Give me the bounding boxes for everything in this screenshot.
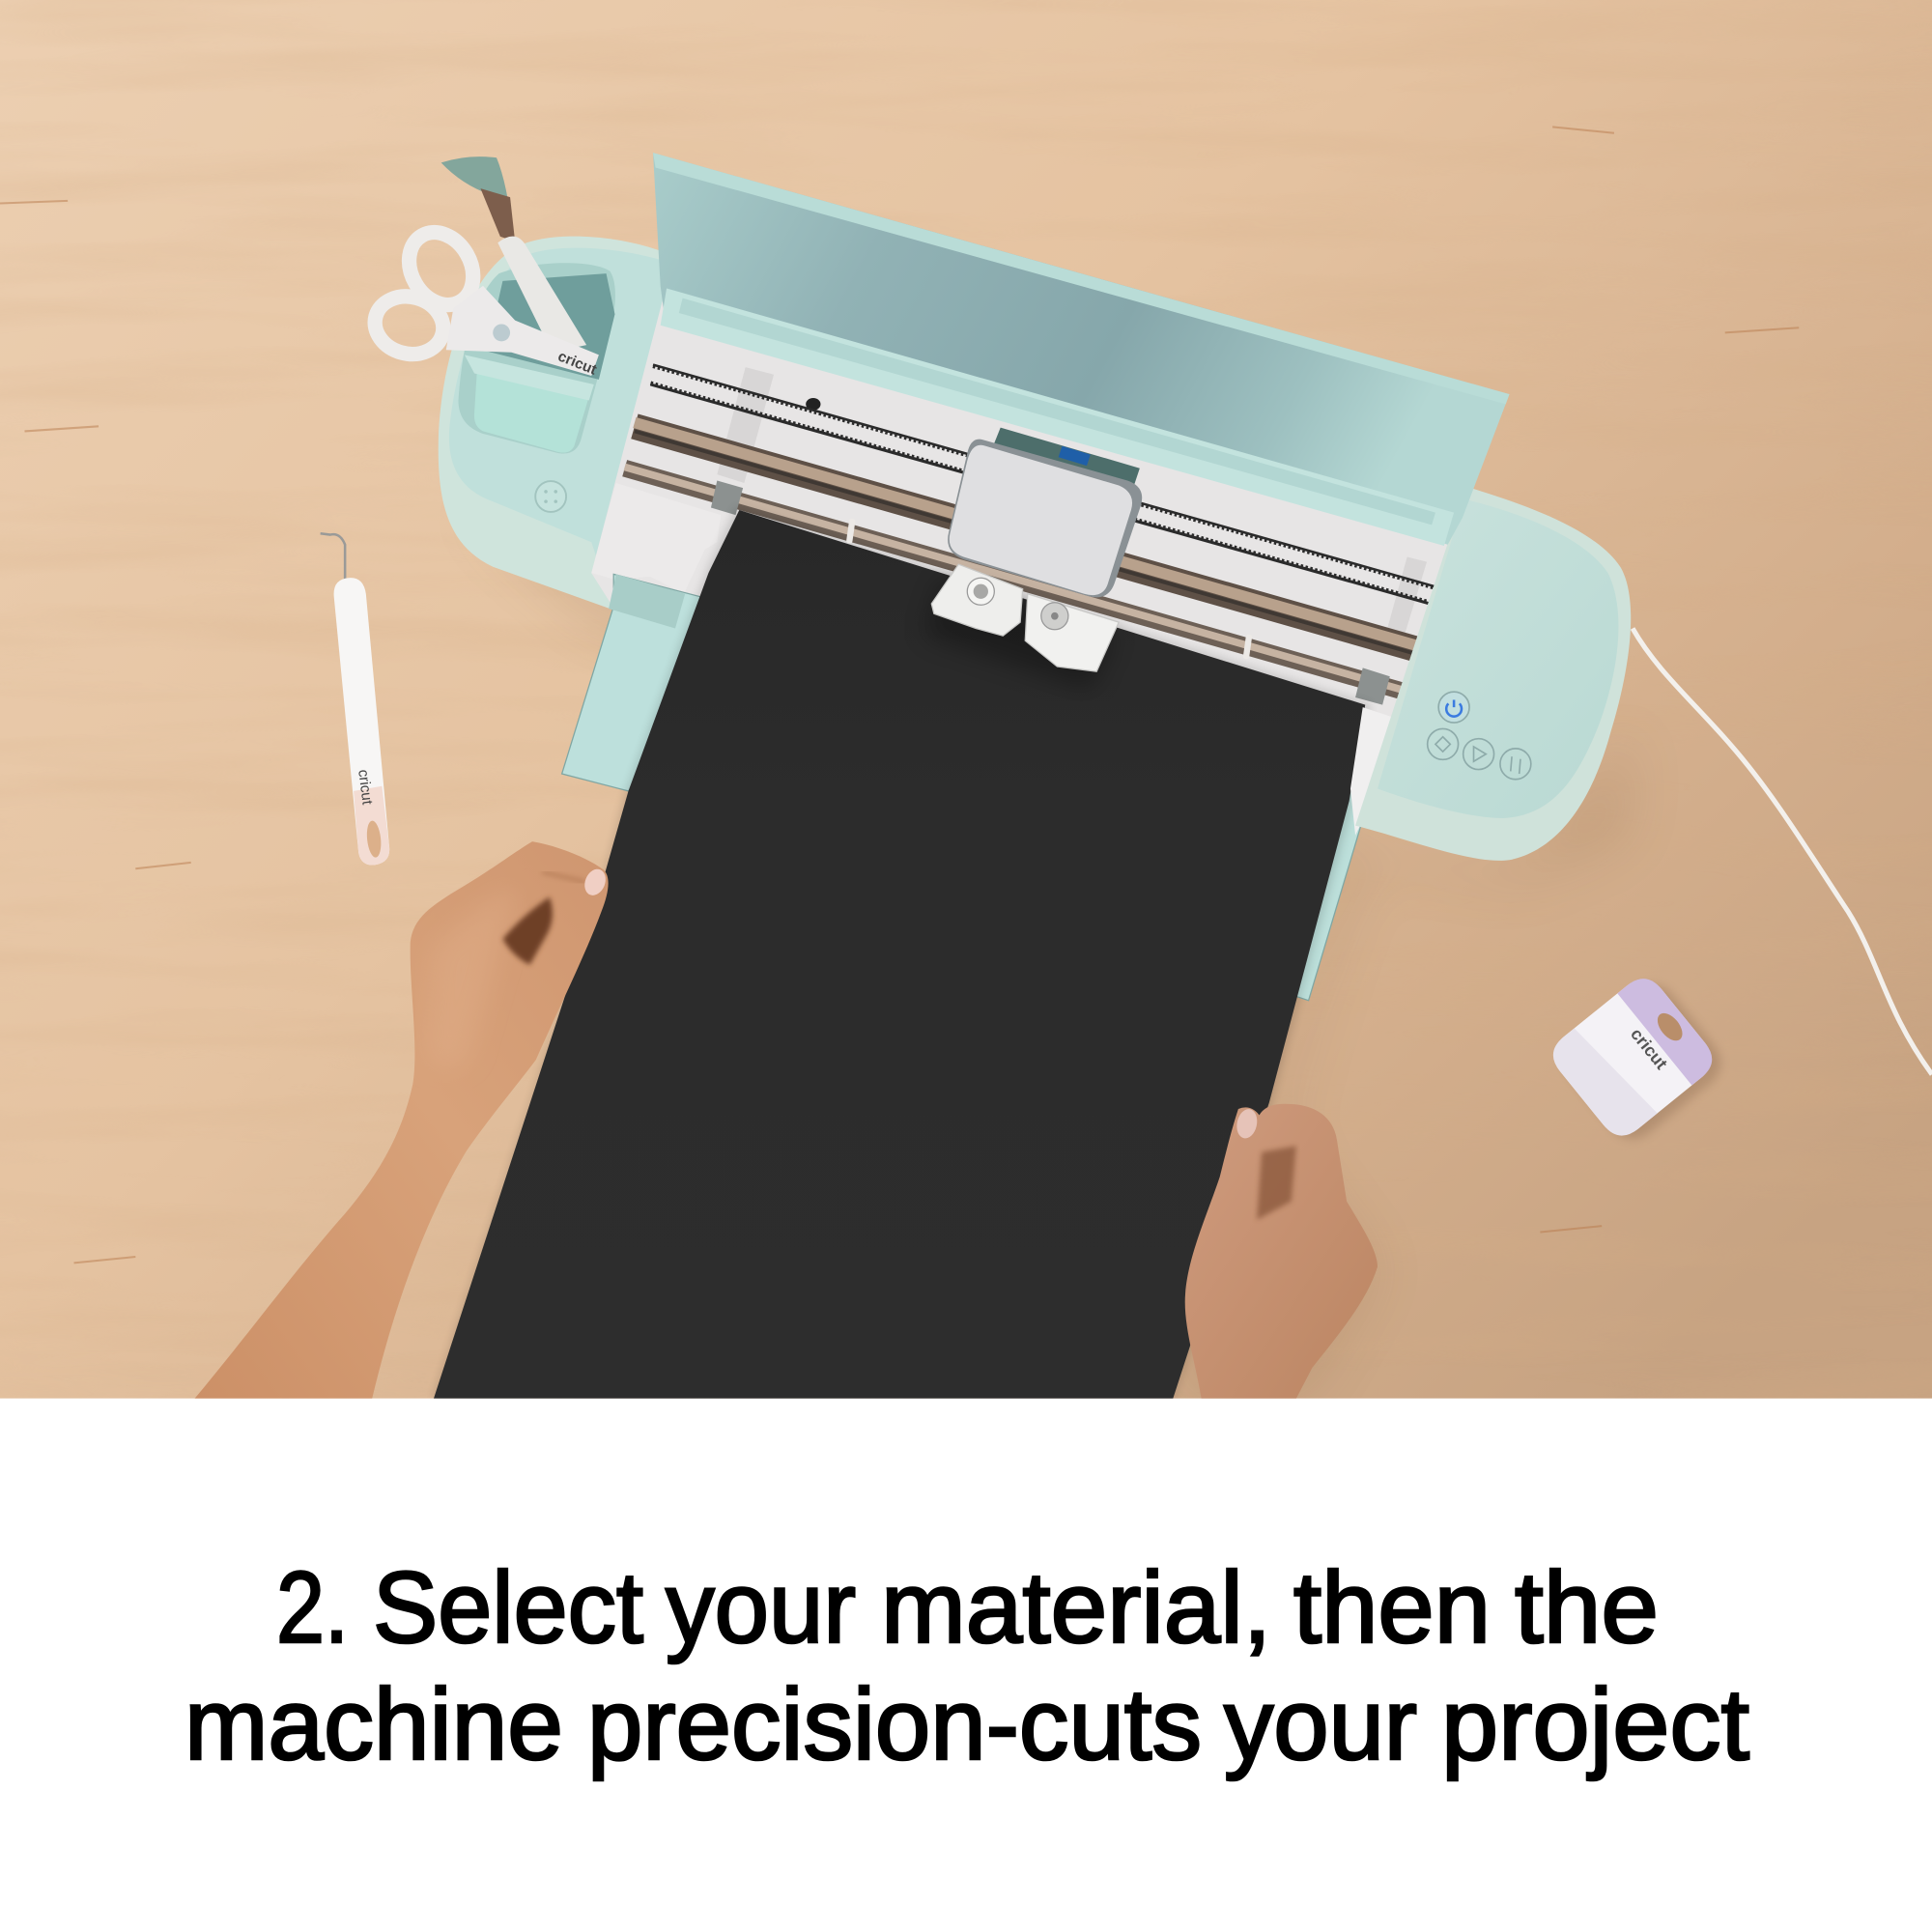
left white mat guide [591,483,721,594]
carriage [931,428,1142,671]
finger gap [502,897,553,965]
wooden desk surface [0,0,1932,1399]
caption line 1: material, [881,1551,1271,1664]
scraper tool [1545,967,1731,1151]
left feed tray [562,574,708,791]
scraper label: cricut [1627,1024,1671,1073]
weeder tool [321,533,389,866]
scissors label: cricut [555,348,599,379]
caption line 2: your [1224,1668,1417,1781]
left roller clip [711,480,743,515]
caption line 1: Select [373,1551,643,1664]
left hand highlight [425,887,518,1069]
caption line 1: the [1515,1551,1659,1664]
power cord [1633,629,1932,1074]
caption line 2: machine [185,1668,563,1781]
drive belt [650,365,1439,605]
interior of machine [591,290,1460,838]
clamp A and clamp B [931,564,1023,636]
weeder label: cricut [355,769,376,807]
caption line 2 [185,1668,1749,1781]
right white mat guide [1350,707,1400,836]
left hand and arm [195,841,610,1399]
caption [185,1551,1749,1781]
left index finger shadow [542,872,585,882]
rail clips [846,519,1252,660]
photo scene: crafting desk [0,0,1932,1399]
lid [653,153,1509,546]
caption line 1: then [1293,1551,1491,1664]
caption line 2: project [1441,1668,1749,1781]
power button [1438,692,1469,723]
upper rail [635,422,1417,654]
spatula [441,156,586,353]
left thumbnail [581,866,610,898]
machine left end [439,237,666,609]
carriage stop [806,398,820,411]
cutting machine [434,153,1631,1399]
caption line 2: precision-cuts [587,1668,1202,1781]
pause button [1500,749,1531,780]
cut smart carriage housing [948,440,1142,597]
lid tray [661,288,1454,546]
carriage shadow on sheet [924,579,1115,690]
machine shadow on desk [554,589,1619,1383]
right feed tray [1293,788,1370,1001]
go button [1463,739,1494,770]
quick-load button [535,481,566,512]
caption line 1: your [666,1551,856,1664]
right hand [1185,1104,1378,1399]
control buttons [1428,692,1531,780]
load button [1428,728,1459,759]
scissors [368,221,599,379]
right roller clip [1355,668,1390,705]
right machine end [1355,487,1631,861]
lid top lip [653,153,1509,404]
black material sheet [434,510,1365,1399]
caption line 1 [276,1551,1659,1664]
caption line 1: 2. [276,1551,349,1664]
finger folds [1257,1146,1296,1220]
material sheet shadow edge [434,508,1370,1399]
interior strips [717,367,1427,635]
lower rail [625,467,1407,693]
carriage circuit chips [993,428,1140,487]
scissors and spatula in cup [368,156,599,379]
right thumbnail [1235,1107,1260,1140]
